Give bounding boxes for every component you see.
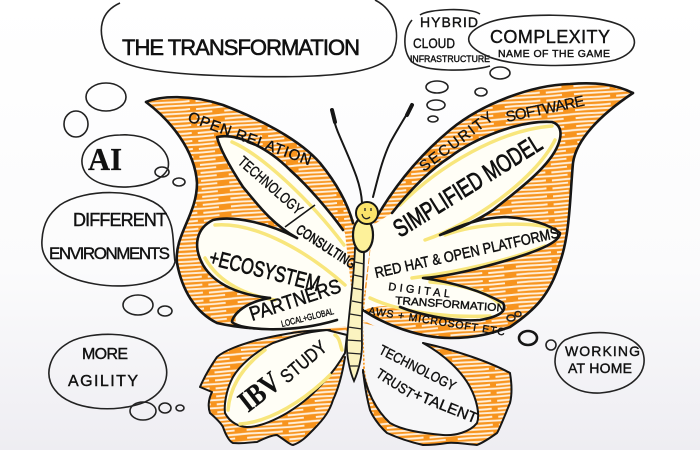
slash divider: [285, 205, 315, 227]
head with smile: [356, 202, 378, 224]
upper right wing: RED HAT & OPEN PLATFORMS: [373, 225, 560, 282]
title cloud: [101, 0, 397, 77]
complexity thought bubble: NAME OF THE GAME: [498, 48, 610, 60]
lower left wing: IBV: [232, 365, 287, 419]
upper right wing: SIMPLIFIED MODEL: [388, 129, 547, 243]
complexity thought bubble: [469, 15, 634, 65]
hybrid cloud thought bubble: CLOUD: [413, 35, 455, 51]
upper right wing: DIGITAL: [388, 281, 451, 301]
working at home cloud: [519, 331, 644, 393]
more agility cloud: AGILITY: [68, 373, 138, 390]
upper left wing: LOCAL+GLOBAL: [280, 306, 335, 329]
lower right wing: TRUST: [373, 365, 418, 402]
more agility cloud: [49, 334, 167, 409]
different environments cloud: DIFFERENT: [73, 210, 167, 230]
lower right wing: [363, 320, 512, 445]
upper right wing: AWS + MICROSOFT ETC: [368, 305, 506, 339]
upper left wing: [146, 97, 359, 332]
upper left wing: PARTNERS: [247, 275, 344, 326]
upper left wing: CONSULTING: [293, 221, 359, 272]
hybrid cloud thought bubble: [405, 10, 490, 70]
label: open relation: OPEN RELATION: [186, 109, 314, 169]
different environments cloud: [42, 193, 175, 286]
thorax: [353, 218, 373, 252]
upper right wing: SECURITY: [416, 109, 497, 175]
working at home cloud: WORKING: [565, 343, 640, 359]
hybrid cloud thought bubble: HYBRID: [420, 14, 478, 30]
AI cloud: AI: [88, 141, 122, 177]
title text: THE TRANSFORMATION: [122, 35, 360, 60]
thought bubbles: bottom left: [130, 402, 184, 420]
lower right wing: TECHNOLOGY: [377, 341, 459, 394]
thought bubbles: upper left: [64, 83, 185, 186]
upper right wing: SOFTWARE: [504, 93, 586, 126]
AI cloud: [82, 135, 168, 187]
petal: simplified model: [364, 122, 560, 320]
working at home cloud: AT HOME: [568, 360, 632, 376]
thought bubbles: middle left: [123, 295, 172, 316]
body: [347, 202, 378, 381]
thought bubbles: top right: [426, 67, 510, 122]
hybrid cloud thought bubble: INFRASTRUCTURE: [410, 54, 490, 64]
petal: partners: [232, 298, 337, 329]
lower left wing: [200, 330, 347, 445]
antennae: [332, 105, 412, 203]
upper left wing: TECHNOLOGY: [234, 153, 306, 219]
upper right wing: [362, 83, 633, 339]
more agility cloud: MORE: [82, 346, 128, 363]
upper left wing: +ECOSYSTEM: [207, 245, 322, 296]
lower left wing: STUDY: [277, 337, 332, 388]
lower right wing: +TALENT: [411, 386, 480, 427]
petal: ecosystem: [197, 219, 297, 298]
different environments cloud: ENVIRONMENTS: [49, 244, 170, 263]
petal: technology trust + talent: [363, 323, 478, 435]
complexity thought bubble: COMPLEXITY: [490, 27, 610, 47]
abdomen: [347, 248, 364, 381]
petal: technology: [197, 136, 356, 331]
butterfly: [146, 83, 633, 445]
petal: IBV study: [225, 330, 347, 427]
upper right wing: TRANSFORMATION: [395, 295, 505, 315]
